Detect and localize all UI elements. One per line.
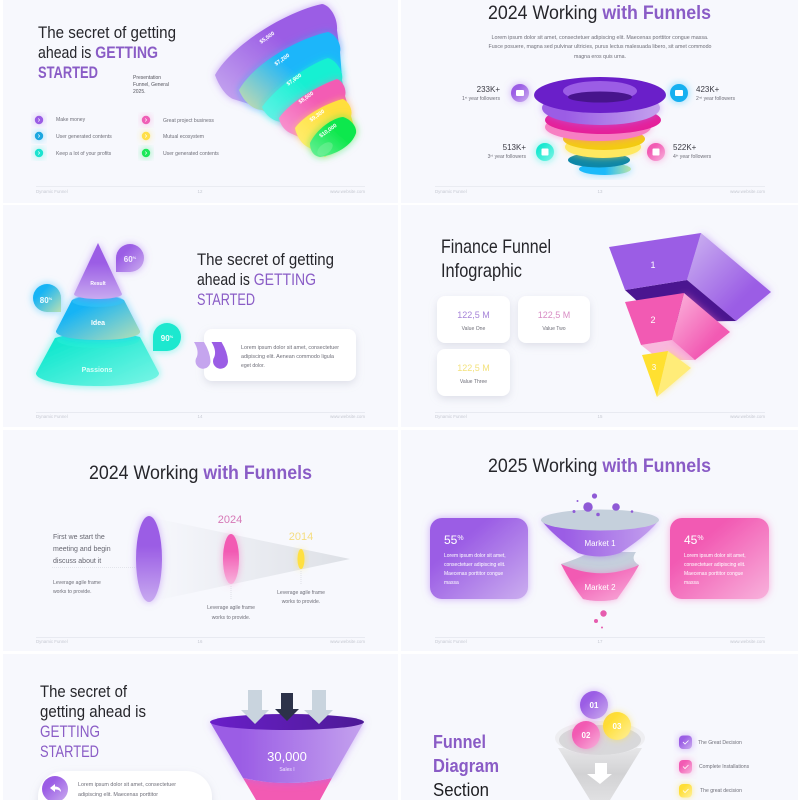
text block: right note: works to provide. [282,599,320,605]
panel: slide 16 horizontal cone [3,430,398,651]
footer: www.website.com [730,414,765,419]
title: funnel diagram section: Diagram [433,756,499,776]
checklist item: complete installations [679,760,750,774]
title: secret of getting ahead: STARTED [40,743,99,761]
checklist item: the great decision: The Great Decision [698,740,742,746]
callout: 90 percent: 90 [161,334,170,343]
card: 55 percent [430,518,528,599]
callout: 60 percent: % [133,255,137,260]
card: 45 percent: massa [684,580,699,586]
text block: meeting intro [53,534,111,595]
bullet list: Make money [56,117,86,123]
text block: meeting intro: meeting and begin [53,546,111,553]
panel: slide 17 market funnel [401,430,798,651]
text block: meeting intro: First we start the [53,534,105,541]
title: secret of getting ahead [40,683,146,761]
footer: www.website.com [330,189,365,194]
card: quote [204,329,356,381]
bullet list: User generated contents [163,151,219,157]
arrow: centre dark [275,693,299,721]
chart: horizontal cone [52,516,350,602]
title: finance funnel infographic [441,236,551,282]
label: 2024: 2024 [218,514,242,526]
decoration: purple particles [572,493,633,516]
title: funnel diagram section [433,732,499,800]
footer: 16 [198,639,203,644]
ball: 01 [580,691,608,719]
panel: slide 14 pyramid [3,205,398,427]
card: text pill: adipiscing elit. Maecenas porttitor [78,792,158,798]
footer [435,637,765,644]
panel: slide funnel diagram section [401,654,798,800]
stat: 2nd year followers [670,84,735,102]
callout: 80 percent: 80 [40,296,49,305]
text block: meeting intro: works to provide. [53,589,92,595]
label: 2014: 2014 [289,531,313,543]
card: value one: 122,5 M [457,310,490,320]
chart: sales funnel [210,714,364,800]
ball: 03 [603,712,631,740]
stat: 2nd year followers: 423K+ [696,85,720,94]
text block: intro paragraph: Fusce posuere, magna sed pulvinar ultricies, purus lectus malesuada libero, sit amet commodo [488,44,712,50]
stat: 3rd year followers: year followers [493,154,526,160]
checklist item: the great decision lower: The great decision [700,788,742,794]
ball: 02: 02 [582,731,591,740]
footer [36,412,365,419]
chart: tilted stacked funnel: $7,200 [274,53,291,67]
card: value two: Value Two [542,326,566,332]
footer: Dynamic Funnel [435,189,467,194]
stat: 1st year followers: year followers [467,96,500,102]
footer: www.website.com [730,189,765,194]
bullet list: Keep a lot of your profits [56,151,112,157]
stat: 3rd year followers: 3 [488,154,490,160]
card: 45 percent: % [697,535,704,542]
chart: tilted stacked funnel: $10,000 [319,123,338,139]
footer [435,186,765,194]
title: 2025 working with funnels: 2025 Working with Funnels [488,455,711,477]
stat: 4th year followers: th [676,154,679,158]
card: 45 percent: 45 [684,533,697,547]
ball: 01: 01 [590,701,599,710]
chart: sales funnel: 30,000 [267,749,307,764]
stat: 2nd year followers: nd [699,96,703,100]
card: text pill [38,771,212,800]
stat: 1st year followers: 1 [462,96,465,102]
text block: intro paragraph: Lorem ipsum dolor sit amet, consectetuer adipiscing elit. Maecenas porttitor congue massa. [492,35,708,41]
arrow: right light [304,690,333,724]
title: secret of getting ahead: getting ahead is [40,703,146,721]
footer [36,186,365,194]
card: value one: Value One [462,326,486,332]
card: value one [437,296,510,343]
card: 45 percent: Maecenas porttitor congue [684,571,743,577]
chart: faceted funnel tier 2: 2 [650,315,656,325]
footer: Dynamic Funnel [36,639,68,644]
title: secret of getting ahead [197,251,334,309]
stat: 4th year followers [647,143,712,161]
ball: 02 [572,721,600,749]
footer: 14 [198,414,203,419]
stat: 4th year followers: 4 [673,154,676,160]
card: 45 percent: Lorem ipsum dolor sit amet, [684,553,746,559]
title: finance funnel infographic: Finance Funnel [441,236,551,258]
callout: 90 percent [153,323,181,351]
card: value three [437,349,510,396]
chart: faceted funnel tier 2 [625,293,730,360]
stat: 4th year followers: year followers [678,154,712,160]
chart: faceted funnel tier 3 [642,351,691,397]
chart: tilted stacked funnel: $5,500 [259,31,276,45]
card: 45 percent [670,518,769,599]
stat: 1st year followers: 233K+ [477,85,500,94]
callout: 60 percent: 60 [124,255,133,264]
footer: 13 [598,189,603,194]
text block: meeting intro: Leverage agile frame [53,580,101,586]
chart: pyramid funnel: Result [90,281,106,287]
chart: sales funnel: Sales I [279,767,295,773]
stat: 3rd year followers [488,143,554,161]
panel: slide sales funnel [3,654,398,800]
bullet list: Mutual ecosystem [163,134,204,140]
chart: faceted funnel tier 1 [609,233,771,322]
chart: market funnel: Market 2 [584,583,616,592]
footer: Dynamic Funnel [36,189,68,194]
footer [435,412,765,419]
chart: market funnel: Market 1 [584,539,616,548]
footer: 17 [598,639,603,644]
chart: pyramid funnel [36,243,159,386]
chart: stacked ring funnel [534,77,666,175]
panel: slide 12 funnel list [3,0,398,203]
chart: grey funnel [555,721,645,800]
title: secret of getting ahead: The secret of getting [197,251,334,269]
footer: www.website.com [730,639,765,644]
checklist item: the great decision [679,736,742,749]
text block: intro paragraph: magna eros quis urna. [574,54,626,60]
title: funnel diagram section: Section [433,780,489,800]
bullet list: User generated contents [56,134,112,140]
footer: 15 [598,414,603,419]
stat: 3rd year followers: 513K+ [503,143,526,152]
stat: 3rd year followers: rd [490,154,493,158]
title: secret of getting ahead: The secret of [40,683,127,701]
card: value three: 122,5 M [457,363,490,373]
card: text pill: Lorem ipsum dolor sit amet, consectetuer [78,782,176,788]
arrow: left light [241,690,269,724]
card: value three: Value Three [460,379,487,385]
text block: right note: Leverage agile frame [277,590,325,596]
title: 2024 working with funnels: 2024 Working with Funnels [488,2,711,24]
card: value two [518,296,590,343]
footer [36,637,365,644]
chart: tilted stacked funnel: $8,500 [298,91,315,105]
footer: www.website.com [330,414,365,419]
card: 55 percent: consectetuer adipiscing elit. [444,562,505,568]
text block: presentation note: 2025. [133,89,146,95]
card: quote: Lorem ipsum dolor sit amet, consectetuer [241,345,339,351]
chart: pyramid funnel: Passions [82,367,112,374]
icon: quotation marks [194,342,228,369]
checklist item: the great decision lower [679,784,742,798]
chart: tilted stacked funnel: $9,300 [309,109,326,123]
card: quote: eget dolor. [241,363,265,369]
text block: meeting intro: discuss about it [53,558,101,565]
bullet list: Great project business [163,118,214,124]
chart: tilted stacked funnel [215,4,356,158]
callout: 90 percent: % [170,334,174,339]
card: 55 percent: Lorem ipsum dolor sit amet, [444,553,506,559]
stat: 1st year followers [462,84,529,102]
text block: centre note: Leverage agile frame [207,605,255,611]
card: 45 percent: consectetuer adipiscing elit. [684,562,745,568]
title: secret of getting ahead: The secret of getting [38,24,176,42]
text block: presentation note: Presentation [133,75,161,81]
card: 55 percent: massa [444,580,459,586]
text block: intro paragraph [488,35,712,60]
title: 2024 working with funnels: 2024 Working with Funnels [89,462,312,484]
decoration: pink particles [594,610,607,628]
card: value two: 122,5 M [538,310,570,320]
card: quote: adipiscing elit. Aenean commodo ligula [241,354,334,360]
footer: 12 [198,189,203,194]
stat: 1st year followers: st [465,96,467,100]
panel: slide 15 finance funnel [401,205,798,427]
card: 55 percent: % [457,535,464,542]
footer: Dynamic Funnel [435,639,467,644]
stat: 2nd year followers: 2 [696,96,699,102]
stat: 2nd year followers: year followers [702,96,735,102]
title: secret of getting ahead: ahead is GETTING [197,271,316,289]
title: secret of getting ahead: STARTED [38,64,98,82]
callout: 80 percent: % [49,296,53,301]
text block: right note [277,590,325,605]
callout: 60 percent [116,244,144,272]
title: funnel diagram section: Funnel [433,732,486,752]
title: secret of getting ahead: GETTING [40,723,100,741]
chart: pyramid funnel: Idea [91,320,105,327]
text block: centre note: works to provide. [212,615,250,621]
stat: 4th year followers: 522K+ [673,143,697,152]
card: 55 percent: Maecenas porttitor congue [444,571,503,577]
text block: presentation note [133,75,169,95]
checklist item: complete installations: Complete Installations [699,764,750,770]
chart: tilted stacked funnel: $7,900 [286,73,303,87]
chart: faceted funnel tier 1: 1 [650,260,656,270]
text block: centre note [207,605,255,621]
chart: faceted funnel tier 3: 3 [652,363,657,372]
ball: 03: 03 [613,722,622,731]
title: secret of getting ahead: STARTED [197,291,255,309]
title: finance funnel infographic: Infographic [441,260,522,282]
title: secret of getting ahead: ahead is GETTING [38,44,158,62]
bullet list [35,116,219,157]
panel: slide 13 followers funnel [401,0,798,203]
title: secret of getting ahead [38,24,176,82]
callout: 80 percent [33,284,61,312]
footer: Dynamic Funnel [435,414,467,419]
card: 55 percent: 55 [444,533,457,547]
chart: market funnel [541,510,659,601]
footer: Dynamic Funnel [36,414,68,419]
footer: www.website.com [330,639,365,644]
text block: presentation note: Funnel, General [133,82,169,88]
